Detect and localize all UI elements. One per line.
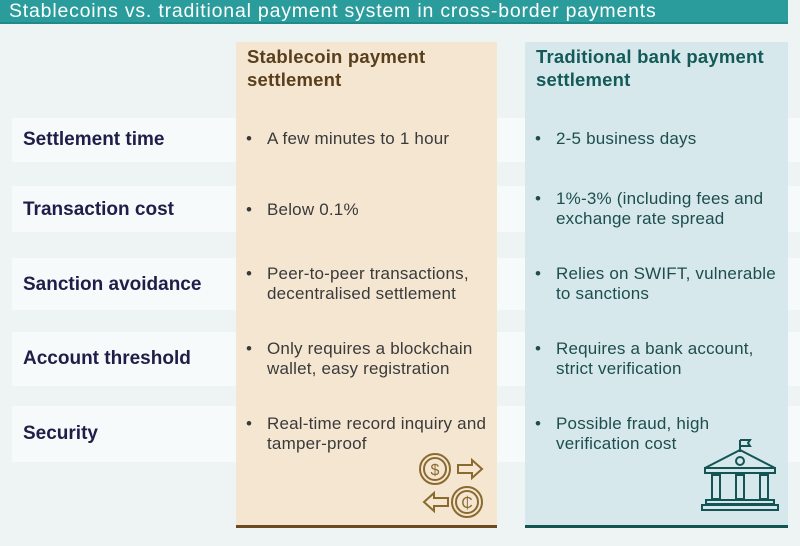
bullet: security: tamper-proof (267, 434, 367, 453)
heading: stablecoin: settlement (247, 69, 342, 90)
bullet: account (236, 339, 473, 379)
label: sanction avoidance: Sanction avoidance (23, 274, 201, 295)
bullet: account: strict verification (556, 359, 682, 378)
bullet: sanction: Peer-to-peer transactions, (267, 264, 469, 283)
label: transaction cost: Transaction cost (23, 199, 174, 220)
panel: stablecoin (236, 42, 497, 528)
row band: sanction avoidance (12, 258, 800, 310)
bullet: account: Only requires a blockchain (267, 339, 473, 358)
icon: coins exchange: $ (431, 462, 440, 479)
icon: bank (701, 439, 779, 511)
bullet: sanction (236, 264, 469, 304)
bullet: cost: exchange rate spread (556, 209, 724, 228)
bullet: security (236, 414, 486, 454)
bullet: sanction: decentralised settlement (267, 284, 456, 303)
row band: settlement time (12, 118, 800, 162)
bullet: cost: Below 0.1% (267, 200, 359, 219)
bullet: sanction: Relies on SWIFT, vulnerable (556, 264, 776, 283)
bullet: security: Possible fraud, high (556, 414, 709, 433)
heading: stablecoin (247, 46, 425, 90)
bullet: time: A few minutes to 1 hour (267, 129, 449, 148)
heading: traditional: Traditional bank payment (536, 46, 764, 67)
bullet: account: wallet, easy registration (267, 359, 450, 378)
bullet: cost: 1%-3% (including fees and (556, 189, 763, 208)
heading: stablecoin: Stablecoin payment (247, 46, 425, 67)
row band: account threshold (12, 332, 800, 386)
bullet: account (525, 339, 754, 379)
bullet: security: verification cost (556, 434, 677, 453)
panel: traditional (525, 42, 788, 528)
bullet: sanction (525, 264, 776, 304)
icon: coins exchange: ₵ (461, 495, 473, 512)
label: account threshold: Account threshold (23, 348, 191, 369)
heading: traditional (536, 46, 764, 90)
bullet: time: 2-5 business days (556, 129, 696, 148)
bullet: security: Real-time record inquiry and (267, 414, 486, 433)
bullet: account: Requires a bank account, (556, 339, 754, 358)
label: security: Security (23, 423, 98, 444)
row band: security (12, 406, 800, 462)
label: settlement time: Settlement time (23, 129, 164, 150)
heading: traditional: settlement (536, 69, 631, 90)
icon: coins exchange (419, 453, 484, 518)
bullet: cost (525, 189, 763, 229)
row band: transaction cost (12, 186, 800, 232)
bullet: sanction: to sanctions (556, 284, 649, 303)
bullet: security (525, 414, 709, 454)
title: Stablecoins vs. traditional payment system in cross-border payments (9, 0, 657, 22)
